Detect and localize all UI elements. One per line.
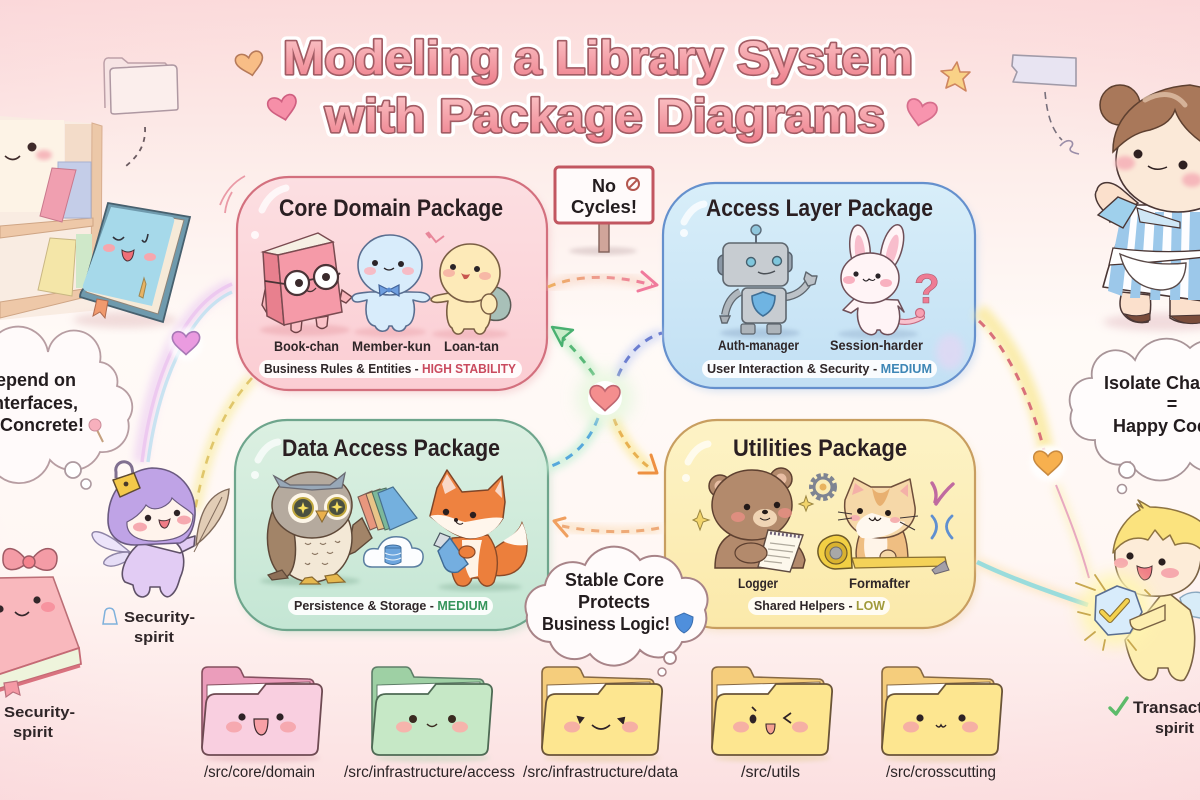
label: book-chan: Book-chan: [274, 339, 339, 354]
arrow: to core (green): [552, 327, 594, 375]
thought bubble: isolate changes: =: [1167, 394, 1177, 414]
stability strip: data: Persistence & Storage - MEDIUM: [294, 599, 488, 613]
panel: access layer package: [663, 183, 978, 392]
folder: core domain: [202, 667, 322, 762]
label: auth-manager: Auth-manager: [718, 338, 800, 353]
security-spirit label 1: spirit: [134, 629, 174, 646]
icon: glowing gem with check: [1076, 574, 1152, 650]
stability strip: access: User Interaction & Security - MEDIUM: [707, 362, 932, 376]
security-spirit label 2: Security-: [4, 704, 75, 721]
panel: data access package: [235, 420, 551, 634]
character: member-kun: [352, 235, 430, 337]
illustration: bookshelf: [0, 116, 102, 320]
folder: data: [542, 667, 662, 762]
label: member-kun: Member-kun: [352, 339, 431, 354]
heading: utilities package: Utilities Package: [733, 435, 907, 462]
thought bubble: stable core: Business Logic!: [542, 614, 670, 634]
icon: lollipop: [89, 419, 103, 442]
character: transaction spirit fairy: [1076, 500, 1200, 737]
connector: teal line to transaction spirit: [977, 562, 1088, 605]
character: librarian girl: [1095, 85, 1200, 331]
title: [283, 31, 913, 142]
character: owl: [260, 472, 372, 586]
security-spirit label 2: spirit: [13, 724, 53, 741]
character: formatter cat: [838, 478, 918, 564]
icon: measuring tape: [818, 535, 949, 574]
title line 2: with Package Diagrams: [324, 89, 885, 142]
character: fox: [430, 470, 527, 591]
folder path labels: /src/infrastructure/access: [344, 764, 515, 781]
icon: stack of books: [358, 487, 417, 530]
folder: access: [372, 667, 492, 762]
icon: usb stick: [434, 533, 468, 572]
folder path labels: /src/utils: [741, 764, 800, 781]
illustration: blue book character: [73, 203, 190, 328]
icon: sparkles: [693, 496, 813, 530]
thought bubble: depend on interfaces: [0, 327, 132, 489]
folder path labels: /src/crosscutting: [886, 764, 996, 781]
arrow: heart to utilities (orange): [614, 419, 657, 473]
thought bubble: stable core: [525, 547, 708, 676]
icon: center heart: [577, 370, 633, 426]
icon: ghost tag top right: [1012, 55, 1079, 154]
icon: blue shield: [675, 613, 693, 633]
arrow: heart to data (blue-green): [546, 418, 598, 468]
icon: ghost folder top left: [104, 58, 178, 166]
connector: right dashed path to heart: [979, 310, 1089, 578]
arrow: core to access: [548, 272, 657, 291]
title line 2: with Package Diagrams: [324, 89, 885, 142]
character: loan-tan: [431, 244, 511, 339]
stability strip: utilities: Shared Helpers - LOW: [754, 599, 885, 613]
stability strip: core: Business Rules & Entities - HIGH STABILITY: [264, 362, 517, 376]
character: auth-manager robot: [718, 225, 817, 338]
folder path labels: [204, 764, 996, 781]
thought bubble: isolate changes: [1070, 339, 1200, 494]
panel: core domain package: [220, 176, 550, 394]
arrow: access to heart (blue): [618, 333, 662, 376]
heading: access layer package: Access Layer Package: [706, 195, 933, 222]
icon: gear: [812, 476, 834, 498]
icon: small pink squiggle: [426, 232, 444, 242]
sign: no cycles: [555, 167, 653, 255]
sign: no cycles: Cycles!: [571, 197, 637, 217]
heading: core domain package: Core Domain Package: [279, 195, 503, 222]
icon: notepad: [758, 530, 803, 572]
icon: no sign: [627, 178, 639, 190]
folder: utils: [712, 667, 832, 762]
character: session-harder rabbit: [838, 222, 924, 339]
panel: utilities package: [665, 420, 978, 632]
folder: crosscutting: [882, 667, 1002, 762]
security-spirit label 1: Security-: [124, 609, 195, 626]
folders row: [202, 667, 1002, 781]
icon: format brackets: [932, 483, 953, 538]
label: formatter: Formafter: [849, 576, 911, 591]
label: logger: Logger: [738, 576, 779, 591]
connectors: dependency arrows between packages: [546, 272, 662, 536]
character: book-chan: [260, 233, 352, 336]
label: loan-tan: Loan-tan: [444, 339, 499, 354]
sign: no cycles: No: [592, 176, 616, 196]
folder path labels: /src/infrastructure/data: [523, 764, 678, 781]
thought bubble: stable core: Stable Core: [565, 570, 664, 590]
icon: database cloud: [364, 537, 423, 567]
character: logger bear: [709, 468, 805, 572]
label: session-harder: Session-harder: [830, 338, 924, 353]
character: security spirit fairy: [92, 462, 229, 646]
transaction-spirit label: [1110, 698, 1200, 737]
icon: padlock: [113, 462, 140, 497]
arrow: utilities to data (orange): [554, 518, 660, 536]
thought bubble: stable core: Protects: [578, 592, 650, 612]
title line 1: Modeling a Library System: [283, 31, 913, 84]
security-spirit label 2: [4, 704, 75, 741]
icon: question mark: ?: [914, 265, 940, 312]
connector: rainbow path left: [140, 284, 252, 510]
icon: feather quill: [194, 489, 229, 552]
security-spirit label 1: [103, 608, 195, 646]
title line 1: Modeling a Library System: [283, 31, 913, 84]
icon: bow: [3, 549, 57, 570]
heading: data access package: Data Access Package: [282, 435, 500, 462]
folder path labels: /src/core/domain: [204, 764, 315, 781]
icon: title hearts and star: [234, 50, 970, 128]
character: pink book with bow: [0, 549, 81, 741]
transaction-spirit label: spirit: [1155, 720, 1194, 737]
